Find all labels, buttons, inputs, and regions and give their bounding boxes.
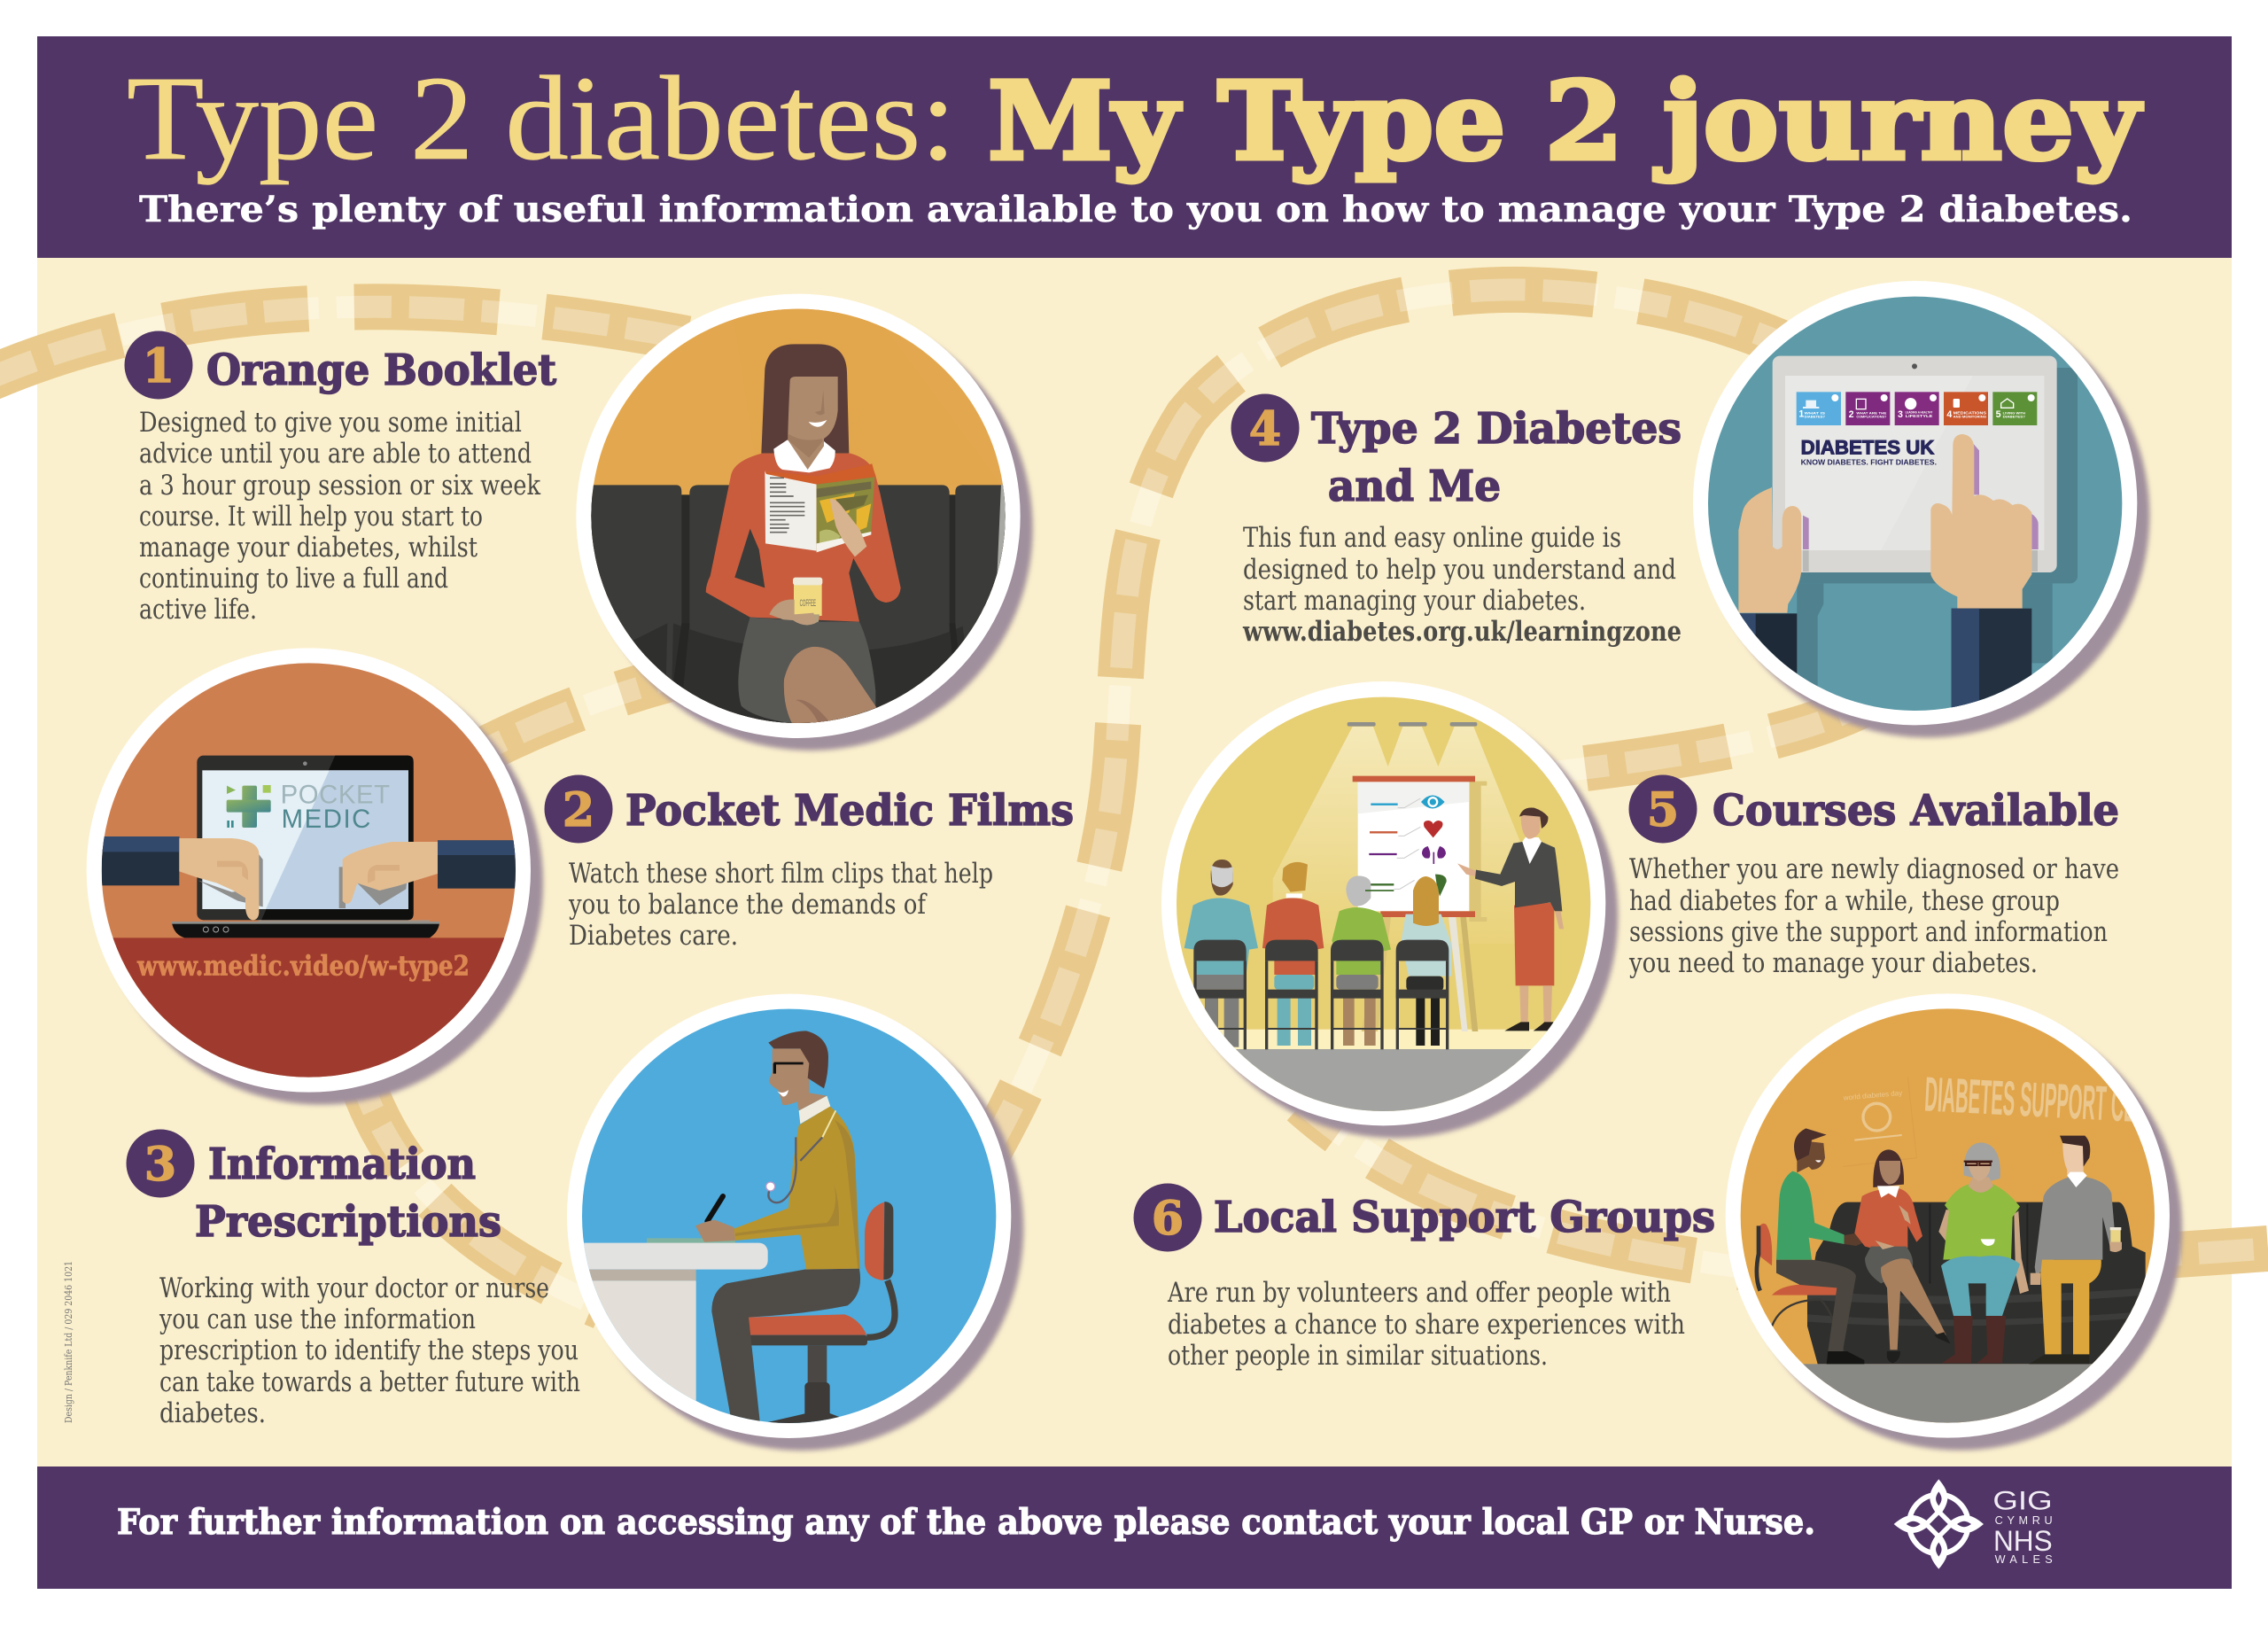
body text 2: Watch these short film clips that help — [569, 858, 993, 890]
menu tile 5 — [1992, 392, 2037, 425]
body text 5: sessions give the support and information — [1629, 916, 2108, 948]
section 6: Local Support Groups: Local Support Groups — [1214, 1193, 1715, 1242]
section 2: Pocket Medic Films — [544, 774, 1074, 952]
header band — [37, 36, 2232, 258]
menu tile 2: COMPLICATIONS? — [1856, 415, 1887, 419]
menu tile 3: 3 — [1898, 409, 1903, 420]
menu tile 1: 1 — [1798, 409, 1804, 420]
menu tile 1: WHAT IS — [1805, 411, 1825, 416]
logo wordmark: GIG — [1992, 1486, 2053, 1515]
presenter — [1457, 807, 1564, 1031]
cream background panel — [37, 258, 2232, 1467]
body text 2 — [568, 858, 993, 952]
section 5: Courses Available: 5 — [1647, 783, 1679, 837]
section 1: Orange Booklet — [124, 331, 556, 626]
section 3: Information Prescriptions: Prescriptions — [195, 1197, 501, 1247]
illustration 2: laptop showing Pocket Medic: POCKET — [281, 781, 390, 810]
body text 1: active life. — [139, 594, 257, 626]
menu tile 2: WHAT ARE THE — [1856, 411, 1887, 416]
body text 4 — [1242, 522, 1682, 648]
body text 2: you to balance the demands of — [568, 889, 928, 921]
menu tile 4: AND MONITORING — [1953, 416, 1986, 419]
menu tile 4: 4 — [1946, 409, 1952, 420]
body text 6: diabetes a chance to share experiences with — [1168, 1309, 1685, 1341]
woman in red sweater — [1854, 1149, 1951, 1363]
NHS Wales logo — [1894, 1479, 2053, 1569]
body text 3: you can use the information — [159, 1303, 476, 1335]
illustration 4: hands using a tablet showing Diabetes UK: DIABETES UK — [1801, 436, 1934, 458]
section 2: Pocket Medic Films: 2 — [563, 783, 594, 837]
section 5: Courses Available: Courses Available — [1713, 786, 2119, 836]
body text 3: prescription to identify the steps you — [159, 1334, 579, 1366]
chart icons — [1369, 795, 1447, 897]
man in grey jumper with coffee — [2029, 1136, 2122, 1364]
illustration 2: laptop showing Pocket Medic — [84, 647, 543, 1105]
footer band — [37, 1467, 2232, 1589]
journey film-strip path — [0, 290, 2268, 1307]
section 5: Courses Available — [1628, 774, 2119, 979]
body text 4: This fun and easy online guide is — [1243, 522, 1621, 554]
body text 1: manage your diabetes, whilst — [139, 532, 478, 564]
body text 6 — [1167, 1277, 1685, 1372]
footer text: For further information on accessing any of the above please contact your local GP or Nurse. — [117, 1502, 1815, 1543]
section 3: Information Prescriptions — [126, 1129, 580, 1429]
section 1: Orange Booklet: 1 — [143, 339, 175, 393]
body text 1: continuing to live a full and — [139, 563, 448, 595]
menu tile 1: DIABETES? — [1805, 415, 1826, 419]
logo wordmark: WALES — [1995, 1553, 2053, 1566]
logo wordmark: NHS — [1993, 1525, 2053, 1557]
illustration 1: woman reading the orange booklet — [576, 292, 1033, 751]
illustration 6: local support group on a sofa: world diabetes day — [1842, 1089, 1903, 1102]
logo wordmark: CYMRU — [1995, 1514, 2053, 1527]
body text 5: had diabetes for a while, these group — [1629, 885, 2060, 917]
body text 2: Diabetes care. — [569, 920, 738, 952]
illustration 6: local support group on a sofa — [1723, 992, 2182, 1451]
logo wordmark — [1992, 1486, 2053, 1566]
section 1: Orange Booklet: Orange Booklet — [206, 346, 556, 395]
menu tile 1 — [1797, 392, 1841, 425]
menu tile 3: LIFESTYLE — [1906, 414, 1933, 419]
section 6: Local Support Groups — [1134, 1184, 1715, 1372]
body text 6: Are run by volunteers and offer people with — [1167, 1277, 1671, 1309]
body text 1: Designed to give you some initial — [139, 407, 522, 439]
illustration 3: doctor writing at a desk — [567, 992, 1023, 1451]
menu tile 4: MEDICATIONS — [1953, 411, 1986, 416]
body text 3 — [159, 1272, 580, 1429]
title — [127, 52, 2143, 185]
body text 3: Working with your doctor or nurse — [159, 1272, 549, 1304]
section 6: Local Support Groups: 6 — [1152, 1192, 1184, 1246]
menu tile 4 — [1944, 392, 1988, 425]
body text 1: advice until you are able to attend — [139, 438, 532, 470]
body text 1: course. It will help you start to — [139, 501, 483, 533]
seated man on chair in green jumper — [1754, 1128, 1864, 1365]
woman with grey hair and green top — [1938, 1142, 2029, 1363]
section 3: Information Prescriptions: 3 — [144, 1138, 176, 1192]
title: Type 2 diabetes: — [127, 52, 956, 185]
menu tile 2 — [1845, 392, 1890, 425]
menu tile 5: DIABETES? — [2003, 415, 2026, 419]
menu tile 5: 5 — [1996, 409, 2001, 420]
illustration 1: woman reading the orange booklet: COFFEE — [800, 598, 816, 609]
section 4: Type 2 Diabetes and Me: Type 2 Diabetes — [1311, 404, 1682, 454]
menu tile 3 — [1895, 392, 1939, 425]
menu tile 3: LEADING A HEALTHY — [1906, 410, 1933, 414]
body text 1 — [139, 407, 540, 626]
body text 4: designed to help you understand and — [1243, 554, 1676, 586]
body text 5: Whether you are newly diagnosed or have — [1629, 853, 2119, 885]
section 2: Pocket Medic Films: Pocket Medic Films — [625, 786, 1074, 836]
folding chairs — [1193, 940, 1449, 1049]
menu tile 5: LIVING WITH — [2003, 411, 2025, 416]
section 3: Information Prescriptions: Information — [208, 1140, 476, 1189]
section 4: Type 2 Diabetes and Me: 4 — [1249, 402, 1281, 456]
menu tile 2: 2 — [1849, 409, 1854, 420]
body text 4: www.diabetes.org.uk/learningzone — [1242, 616, 1682, 648]
body text 3: diabetes. — [159, 1397, 266, 1429]
body text 6: other people in similar situations. — [1168, 1340, 1548, 1372]
seated audience — [1184, 860, 1451, 1047]
illustration 4: hands using a tablet showing Diabetes UK: KNOW DIABETES. FIGHT DIABETES. — [1801, 458, 1937, 466]
illustration 5: group course with a presenter — [1161, 678, 1618, 1138]
design credit: Design / Penknife Ltd / 029 2046 1021 — [63, 1261, 74, 1423]
body text 5 — [1628, 853, 2119, 979]
section 4: Type 2 Diabetes and Me: and Me — [1328, 462, 1501, 511]
body text 1: a 3 hour group session or six week — [139, 470, 540, 502]
illustration 2: laptop showing Pocket Medic: www.medic.video/w-type2 — [136, 951, 470, 983]
body text 3: can take towards a better future with — [159, 1366, 580, 1398]
title: My Type 2 journey — [988, 58, 2143, 184]
illustration 4: hands using a tablet showing Diabetes UK — [1692, 279, 2149, 737]
icon: celtic knot — [1894, 1479, 1984, 1569]
subtitle: There’s plenty of useful information available to you on how to manage your Type 2 diabetes. — [139, 189, 2132, 230]
illustration 2: laptop showing Pocket Medic: MEDIC — [282, 805, 370, 834]
body text 4: start managing your diabetes. — [1243, 585, 1586, 617]
section 4: Type 2 Diabetes and Me — [1231, 393, 1682, 648]
body text 5: you need to manage your diabetes. — [1628, 947, 2038, 979]
